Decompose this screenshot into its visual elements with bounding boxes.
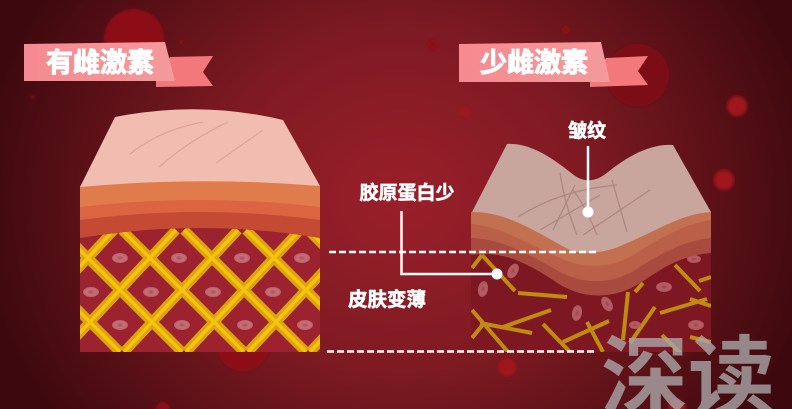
callout: 皱纹 xyxy=(568,119,606,218)
skin surface xyxy=(80,109,320,187)
ribbon front xyxy=(24,42,175,81)
callout label: 胶原蛋白少 xyxy=(359,181,455,204)
label: 皮肤变薄: 皮肤变薄 xyxy=(348,288,426,311)
callout dot xyxy=(492,268,502,280)
thickness guide lines xyxy=(327,252,597,352)
ribbon tail xyxy=(156,56,213,87)
dermis base xyxy=(80,225,320,352)
damaged cells xyxy=(477,255,704,330)
fine lines xyxy=(130,122,263,167)
collagen lattice xyxy=(80,228,320,352)
wrinkled skin surface xyxy=(472,144,711,253)
wrinkles xyxy=(518,173,650,235)
callout dot xyxy=(582,206,594,218)
callout leader xyxy=(402,211,497,274)
thinning skin block xyxy=(471,144,711,353)
callout leader xyxy=(587,146,589,212)
banner title: 少雌激素 xyxy=(480,48,588,78)
banner title: 有雌激素 xyxy=(46,48,154,78)
ribbon tail xyxy=(590,56,648,87)
ribbon front xyxy=(459,42,610,82)
skin layers xyxy=(80,179,320,238)
banner: 少雌激素 xyxy=(459,42,648,87)
healthy skin block xyxy=(80,109,320,352)
blood cells xyxy=(83,253,313,330)
banner: 有雌激素 xyxy=(24,42,213,87)
dermis base xyxy=(471,240,711,352)
callout label: 皱纹 xyxy=(568,119,606,142)
broken collagen fibres xyxy=(472,255,711,353)
skin layers xyxy=(471,212,711,295)
callout: 胶原蛋白少 xyxy=(359,181,502,280)
